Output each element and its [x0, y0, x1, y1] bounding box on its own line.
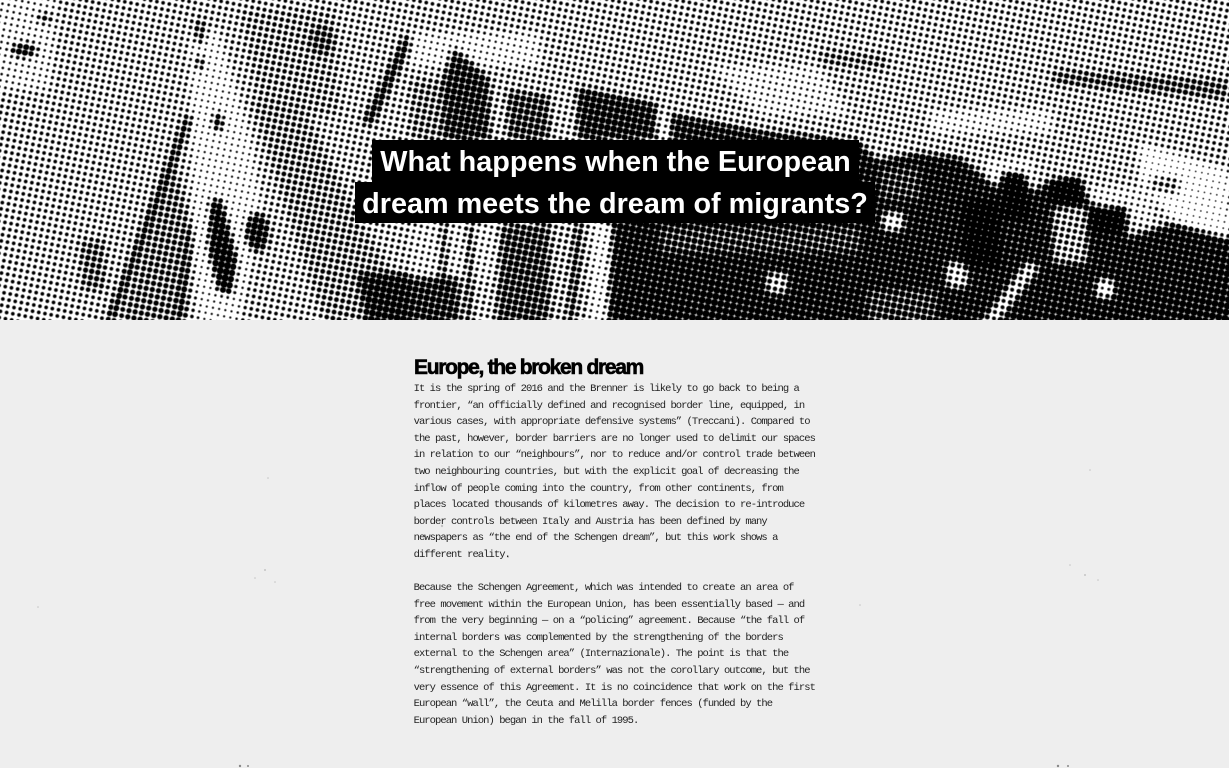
title — [355, 140, 875, 223]
paragraph 2: Because the Schengen Agreement, which was intended to create an area of free movement within the European Union, has been essentially based — and from the very beginning — on a “policing” agreement. Because “the fall of internal borders was complemented by the strengthening of the borders external to the Schengen area” (Internazionale). The point is that the “strengthening of external borders” was not the corollary outcome, but the very essence of this Agreement. It is no coincidence that work on the first European “wall”, the Ceuta and Melilla border fences (funded by the European Union) began in the fall of 1995. — [414, 582, 815, 727]
below title — [410, 224, 500, 280]
building silhouette, centre — [410, 80, 443, 140]
paragraph 1: It is the spring of 2016 and the Brenner is likely to go back to being a frontier, “an officially defined and recognised border line, equipped, in various cases, with appropriate defensive systems” (Treccani). Compared to the past, however, border barriers are no longer used to delimit our spaces in relation to our “neighbours”, nor to reduce and/or control trade between two neighbouring countries, but with the explicit goal of decreasing the inflow of people coming into the country, from other continents, from places located thousands of kilometres away. The decision to re-introduce border controls between Italy and Austria has been defined by many newspapers as “the end of the Schengen dream”, but this work shows a different reality. — [414, 383, 815, 561]
sky tones — [410, 33, 540, 66]
title: dream meets the dream of migrants? — [362, 188, 868, 220]
halftone photograph of the Brenner border — [0, 0, 1229, 320]
building silhouette, right — [600, 140, 1229, 340]
heading: Europe, the broken dream — [414, 356, 643, 379]
faint paper specks — [37, 469, 1099, 768]
left side tones — [0, 0, 60, 90]
title: What happens when the European — [380, 146, 851, 178]
